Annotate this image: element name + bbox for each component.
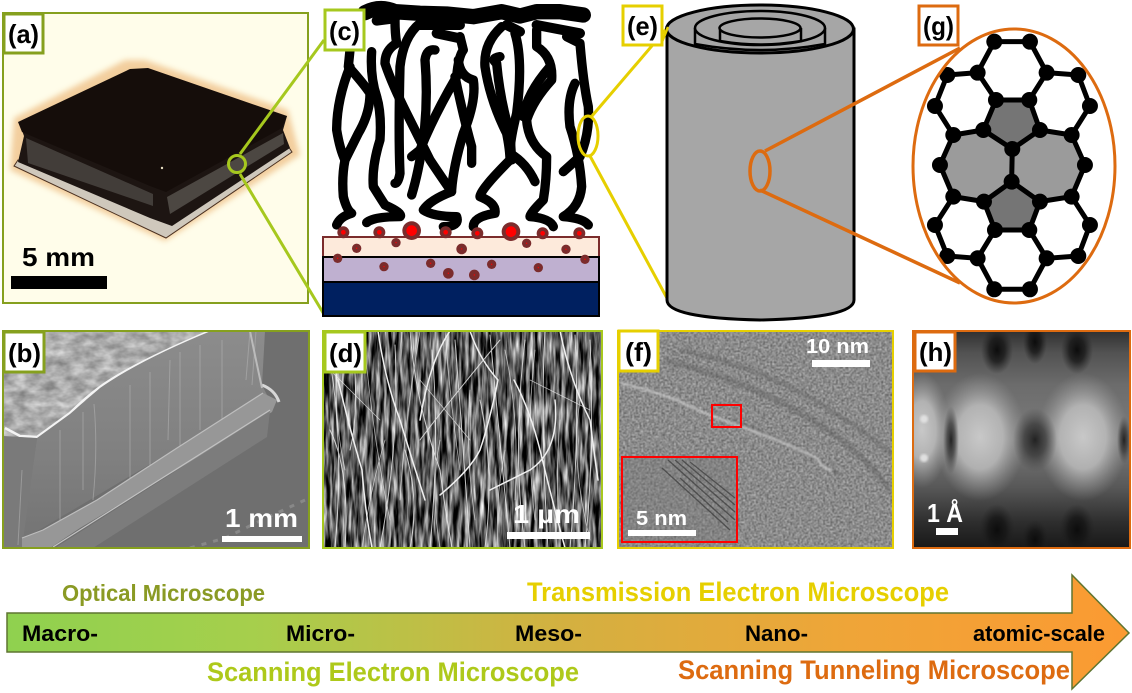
panel e: multi-walled nanotube cylinder — [623, 5, 854, 320]
label (h) — [915, 332, 955, 371]
label: Optical Microscope: Optical Microscope — [62, 580, 265, 606]
label: Scanning Tunneling Microscope: Scanning Tunneling Microscope — [678, 655, 1070, 685]
length scale labels — [22, 621, 1105, 646]
sample top face — [18, 68, 287, 192]
scale bar: 1 µm: 1 µm — [513, 499, 580, 529]
scale bar: 1 mm — [222, 503, 302, 542]
scale bar: 5 nm — [628, 508, 696, 536]
top surface of forest — [3, 331, 210, 437]
label (f) — [619, 331, 658, 371]
label (e): (e) — [627, 11, 658, 41]
length scale labels: atomic-scale — [973, 621, 1105, 646]
panel d: SEM image of nanotubes — [323, 331, 602, 548]
label (c) — [325, 10, 364, 50]
scale bar: 10 nm: 10 nm — [806, 336, 869, 358]
label (f): (f) — [625, 337, 652, 367]
label (g): (g) — [923, 11, 954, 41]
label (a) — [4, 14, 43, 53]
scale bar: 10 nm — [806, 336, 870, 367]
base ridge — [22, 393, 277, 548]
panel g: graphene hexagonal lattice — [913, 6, 1115, 303]
substrate layers — [323, 237, 599, 316]
lower strip under ridge — [55, 411, 270, 548]
connector lines c to e — [578, 27, 668, 300]
tube wall bands — [620, 350, 893, 490]
small red selection box — [712, 405, 741, 427]
label (e) — [623, 6, 662, 45]
sample base plate — [14, 146, 292, 238]
sample side faces — [18, 116, 290, 226]
length scale labels: Micro- — [286, 621, 355, 646]
scale bar: 1 Å: 1 Å — [927, 498, 963, 528]
scale bar: 5 nm: 5 nm — [636, 508, 687, 530]
label: Transmission Electron Microscope: Transmission Electron Microscope — [527, 577, 949, 607]
inset with lattice fringes — [622, 457, 737, 542]
label (c): (c) — [329, 16, 360, 46]
catalyst particles — [333, 221, 590, 280]
panel b: SEM image — [3, 331, 309, 548]
tubes — [337, 9, 589, 227]
length scale labels: Macro- — [22, 621, 98, 646]
label (a): (a) — [8, 19, 39, 49]
label (d): (d) — [329, 338, 362, 368]
scale bar: 5 mm — [11, 242, 107, 289]
label (g) — [919, 6, 958, 45]
panel c: nanotube forest schematic — [323, 9, 599, 316]
scale arrow — [7, 575, 1129, 689]
label: Scanning Electron Microscope: Scanning Electron Microscope — [207, 657, 579, 687]
label (b) — [4, 332, 44, 372]
connector lines e to g — [750, 48, 960, 283]
label (b): (b) — [8, 338, 41, 368]
orange zoom ellipse — [913, 29, 1115, 303]
panel f: TEM image — [618, 331, 893, 548]
scale bar: 1 µm — [507, 499, 590, 539]
panel h: STM image — [912, 330, 1131, 549]
length scale labels: Meso- — [515, 621, 582, 646]
length scale labels: Nano- — [745, 621, 808, 646]
forest side face — [26, 332, 267, 518]
scale bar: 1 mm: 1 mm — [225, 503, 298, 533]
panel a: optical photo of sample — [3, 13, 308, 303]
label (h): (h) — [919, 337, 952, 367]
scale bar: 5 mm: 5 mm — [22, 242, 95, 272]
label (d) — [325, 332, 365, 372]
connector lines a to c — [228, 40, 325, 316]
